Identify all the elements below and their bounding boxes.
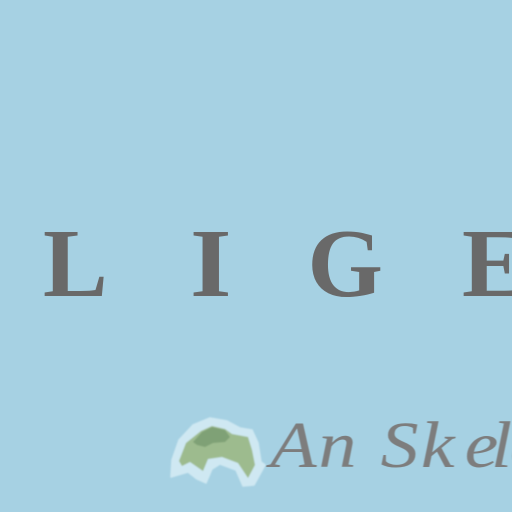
- title: large spaced letters: I: [190, 210, 232, 318]
- title: large spaced letters: [43, 210, 512, 318]
- title: large spaced letters: L: [43, 210, 108, 317]
- icon: island: [171, 418, 265, 486]
- title: large spaced letters: G: [308, 210, 383, 317]
